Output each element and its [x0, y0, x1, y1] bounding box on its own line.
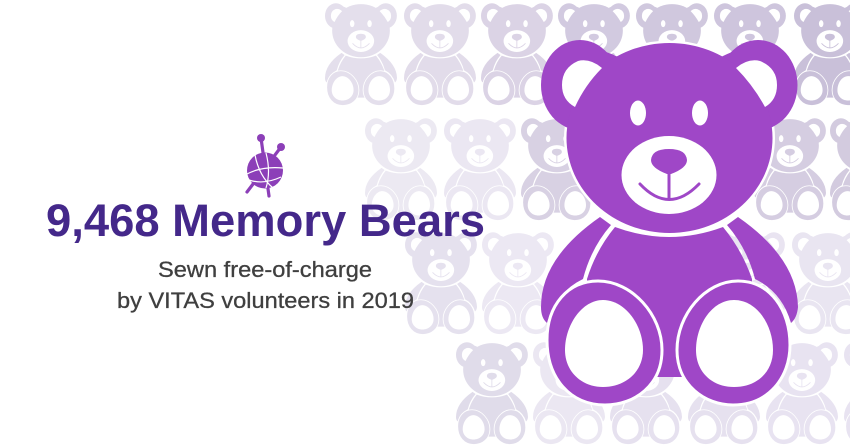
- icon: yarn ball with knitting needles: [247, 134, 285, 196]
- row 3 bears: [405, 232, 850, 334]
- subtitle: [117, 257, 414, 313]
- row 1 bears: [325, 3, 850, 105]
- row 2 bears: [365, 118, 850, 220]
- background pattern of pale bears: [325, 3, 850, 444]
- subtitle: Sewn free-of-charge: [158, 257, 372, 282]
- large purple teddy bear: [541, 40, 798, 405]
- title: 9,468 Memory Bears: [46, 195, 485, 246]
- subtitle: by VITAS volunteers in 2019: [117, 288, 414, 313]
- row 4 bears: [456, 342, 850, 444]
